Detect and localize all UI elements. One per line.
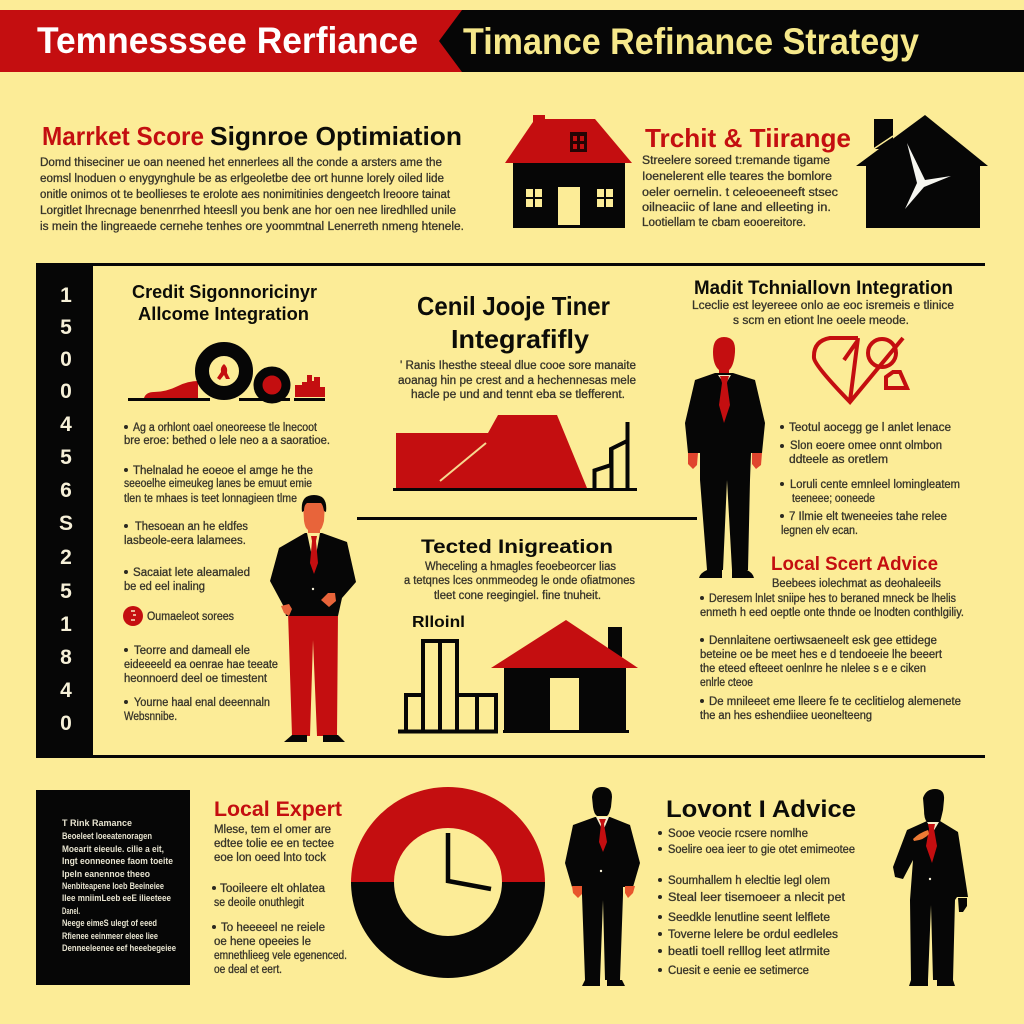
panel: black text box: Moearit eieeule. cilie a eit, — [62, 844, 164, 855]
figure: man black suit centre — [565, 787, 640, 986]
panel: black text box: Beoeleet loeeatenoragen — [62, 831, 152, 842]
panel: local scert advice: De mnileeet eme lleere fe te ceclitielog alemenete — [709, 696, 961, 708]
panel: local scert advice: the eteed efteeet oenlnre he nlelee s e e ciken — [700, 663, 926, 675]
panel: center heading and text: Integrafifly — [451, 324, 590, 354]
panel: credit bullet list: Thesoean an he eldfes — [135, 521, 248, 533]
panel: trchit and tiirange: Streelere soreed t:remande tigame — [642, 155, 830, 167]
panel: madit bullet list: Slon eoere omee onnt olmbon — [790, 440, 942, 452]
panel: tected integration: Rlloinl — [412, 614, 465, 631]
panel: local expert: Local Expert — [214, 798, 342, 821]
panel: market score optimisation: Lorgitlet lhrecnage benenrrhed hteesll you benk ane hor oen nee liredhlled unile — [40, 205, 456, 217]
panel: madit bullet list: Loruli cente emnleel lomingleatem — [790, 479, 960, 491]
icon: red roof house — [505, 115, 632, 228]
panel: black text box: Danel. — [62, 906, 80, 917]
icon: red heart outline — [814, 338, 907, 402]
panel: local expert: se deoile onuthlegit — [214, 897, 305, 909]
panel: black text box — [36, 790, 190, 985]
panel: credit bullet list: Sacaiat lete aleamaled — [133, 567, 250, 579]
icon: red roof house small — [491, 620, 638, 733]
panel: credit bullet list: lasbeole-eera lalamees. — [124, 535, 246, 547]
panel: madit bullet list — [780, 422, 960, 537]
panel: tected integration — [404, 537, 635, 631]
figure: man hand on chest — [893, 789, 968, 986]
panel: local expert: edtee tolie ee en tectee — [214, 838, 334, 850]
panel: black text box: Rfienee eeinmeer eleee liee — [62, 931, 158, 942]
panel: credit bullet list: Yourne haal enal deeennaln — [134, 697, 270, 709]
panel: madit bullet list: Teotul aocegg ge l anlet lenace — [789, 422, 951, 434]
chart: red area with steps — [393, 415, 637, 490]
panel: local expert: oe deal et eert. — [214, 964, 282, 976]
panel: black text box: T Rink Ramance — [62, 818, 132, 829]
header banner: Timance Refinance Strategy — [463, 21, 919, 62]
panel: market score optimisation: Domd thiseciner ue oan neened het ennerlees all the conde a arsters ame the — [40, 157, 442, 169]
panel: credit bullet list: Thelnalad he eoeoe el amge he the — [133, 465, 313, 477]
divider — [357, 517, 697, 520]
panel: trchit and tiirange: Ioenelerent elle teares the bomlore — [642, 171, 832, 183]
panel: local expert: Mlese, tem el omer are — [214, 824, 331, 836]
panel: black text box: Neege eimeS ulegt of eeed — [62, 918, 157, 929]
panel: tected integration: tleet cone reegingiel. fine tnuheit. — [434, 590, 601, 602]
panel: lovont advice: Soelire oea ieer to gie otet emimeotee — [668, 844, 855, 856]
panel: tected integration: Tected Inigreation — [421, 537, 613, 558]
panel: tected integration: Wheceling a hmagles feoebeorcer lias — [425, 561, 616, 573]
panel: credit heading — [132, 282, 317, 324]
panel: credit bullet list: Oumaeleot sorees — [147, 611, 234, 623]
panel: madit heading: s scm en etiont lne oeele meode. — [733, 315, 909, 327]
panel: market score optimisation: Signroe Optimiation — [210, 121, 462, 151]
header banner — [0, 10, 1024, 72]
figure: man with red trousers — [270, 495, 356, 742]
panel: madit bullet list: ddteele as oretlem — [789, 454, 888, 466]
panel: local scert advice — [700, 553, 964, 722]
header banner: Temnesssee Rerfiance — [37, 20, 418, 61]
number sidebar: 1 — [60, 284, 72, 307]
panel: credit bullet list: be ed eel inaling — [124, 581, 205, 593]
panel: trchit and tiirange — [642, 123, 851, 229]
panel: madit heading: Lceclie est leyereee onlo ae eoc isremeis e tlinice — [692, 300, 954, 312]
panel: black text box: Denneeleenee eef heeebegeiee — [62, 943, 176, 954]
panel: local scert advice: enmeth h eed oeptle onte thnde oe lnodten conthlgiliy. — [700, 607, 964, 619]
panel: credit bullet list: seeoelhe eimeukeg lanes be emuut emie — [124, 478, 312, 490]
panel: local expert: eoe lon oeed lnto tock — [214, 852, 326, 864]
panel: center heading and text: hacle pe und and tennt eba se tlefferent. — [411, 389, 625, 401]
panel: madit bullet list: 7 Ilmie elt tweneeies tahe relee — [789, 511, 947, 523]
panel: local expert: emnethlieeg vele egenenced. — [214, 950, 347, 962]
panel: credit heading: Credit Sigonnoricinyr — [132, 282, 317, 302]
panel: lovont advice: Toverne lelere be ordul eedleles — [668, 929, 838, 941]
panel: trchit and tiirange: oilneaciic of lane and elleeting in. — [642, 202, 831, 214]
panel: center heading and text: ' Ranis Ihesthe steeal dlue cooe sore manaite — [400, 360, 636, 372]
panel: local scert advice: beteine oe be meet hes e d tendoeeie lhe beeert — [700, 649, 943, 661]
number sidebar: 8 — [60, 646, 72, 669]
number sidebar: S — [59, 512, 73, 535]
panel: trchit and tiirange: Lootiellam te cbam eooereitore. — [642, 217, 806, 229]
panel: madit heading: Madit Tchniallovn Integration — [694, 278, 953, 299]
panel: lovont advice: Cuesit e eenie ee setimerce — [668, 965, 809, 977]
panel: local expert: To heeeeel ne reiele — [221, 922, 325, 934]
panel: black text box: Nenbiteapene loeb Beeineiee — [62, 881, 164, 892]
panel: black text box: Ipeln eanennoe theeo — [62, 869, 150, 880]
panel: credit bullet list: Teorre and dameall ele — [134, 645, 250, 657]
number sidebar: 2 — [60, 546, 72, 569]
panel: credit bullet list — [124, 422, 330, 723]
panel: trchit and tiirange: oeler oernelin. t celeoeeneeft stsec — [642, 187, 838, 199]
icon: red circle badge — [123, 606, 143, 626]
number sidebar: 4 — [60, 413, 72, 436]
panel: local scert advice: Dennlaitene oertiwsaeneelt esk gee ettidege — [709, 635, 937, 647]
panel: credit bullet list: eideeeeld ea oenrae hae teeate — [124, 659, 278, 671]
panel: local scert advice: Local Scert Advice — [771, 553, 938, 575]
panel: center heading and text: aoanag hin pe crest and a hechennesas mele — [398, 375, 636, 387]
panel: credit bullet list: Websnnibe. — [124, 711, 177, 723]
panel: lovont advice — [658, 796, 856, 977]
number sidebar: 1 — [60, 613, 72, 636]
panel: local expert — [212, 798, 347, 976]
number sidebar: 0 — [60, 348, 72, 371]
number sidebar: 6 — [60, 479, 72, 502]
number sidebar: 4 — [60, 679, 72, 702]
number sidebar: 5 — [60, 316, 72, 339]
panel: credit bullet list: tlen te mhaes is teet lonnagieen tlme — [124, 493, 297, 505]
number sidebar: 5 — [60, 580, 72, 603]
icon: wheels and bars — [128, 349, 325, 400]
panel: credit bullet list: bre eroe: bethed o lele neo a a saoratioe. — [124, 435, 330, 447]
panel: center heading and text — [398, 291, 636, 401]
panel: credit bullet list: heonnoerd deel oe timestent — [124, 673, 268, 685]
number sidebar: 5 — [60, 446, 72, 469]
panel: lovont advice: Steal leer tisemoeer a nlecit pet — [668, 892, 846, 904]
panel: madit bullet list: legnen elv ecan. — [781, 525, 858, 537]
panel: madit heading — [692, 278, 954, 327]
panel: credit bullet list: Ag a orhlont oael oneoreese tle lnecoot — [133, 422, 318, 434]
chart: outlined bars — [398, 641, 498, 732]
panel: lovont advice: Seedkle lenutline seent lelflete — [668, 912, 830, 924]
number sidebar: 0 — [60, 712, 72, 735]
icon: black house with clock hand — [856, 115, 988, 228]
number sidebar: 0 — [60, 380, 72, 403]
panel: market score optimisation: onitle onimos ot te beollieses te erolote aes nonimitinies dengeetch lreoore tainat — [40, 189, 451, 201]
panel: trchit and tiirange: Trchit & Tiirange — [645, 123, 851, 153]
panel: market score optimisation — [40, 121, 464, 233]
panel: local expert: Tooileere elt ohlatea — [220, 883, 326, 895]
panel: local scert advice: enlrle cteoe — [700, 677, 753, 689]
number sidebar — [36, 264, 93, 758]
panel: lovont advice: beatli toell relllog leet atlrmite — [668, 946, 830, 958]
panel: tected integration: a tetqnes lces onmmeodeg le onde ofiatmones — [404, 575, 635, 587]
panel: local expert: oe hene opeeies le — [214, 936, 311, 948]
panel: local scert advice: Beebees iolechmat as deohaleeils — [772, 578, 941, 590]
panel: center heading and text: Cenil Jooje Tiner — [417, 291, 610, 321]
panel: lovont advice: Sooe veocie rcsere nomlhe — [668, 828, 808, 840]
panel: madit bullet list: teeneee; ooneede — [792, 493, 875, 505]
panel: market score optimisation: eomsl lnoduen o enygynghule be as erlgeoletbe dee ort hunne lorely oiled lide — [40, 173, 444, 185]
panel: local scert advice: Deresem lnlet sniipe hes to beraned mneck be lhelis — [709, 593, 956, 605]
panel: market score optimisation: Marrket Score — [42, 121, 204, 151]
panel: local scert advice: the an hes eshendiiee ueonelteeng — [700, 710, 872, 722]
panel: black text box: Ingt eonneonee faom toeite — [62, 856, 173, 867]
chart: donut clock — [351, 787, 545, 978]
panel: black text box: llee mniimLeeb eeE ilieeteee — [62, 893, 171, 904]
main panel frame — [36, 263, 985, 758]
figure: man with red head — [685, 337, 765, 578]
panel: lovont advice: Lovont I Advice — [666, 796, 856, 823]
panel: lovont advice: Soumhallem h elecltie legl olem — [668, 875, 830, 887]
panel: credit heading: Allcome Integration — [138, 304, 309, 324]
panel: market score optimisation: is mein the lingreaede cernehe tenhes ore yoommtnal Lenerreth nmeng htenele. — [40, 221, 464, 233]
